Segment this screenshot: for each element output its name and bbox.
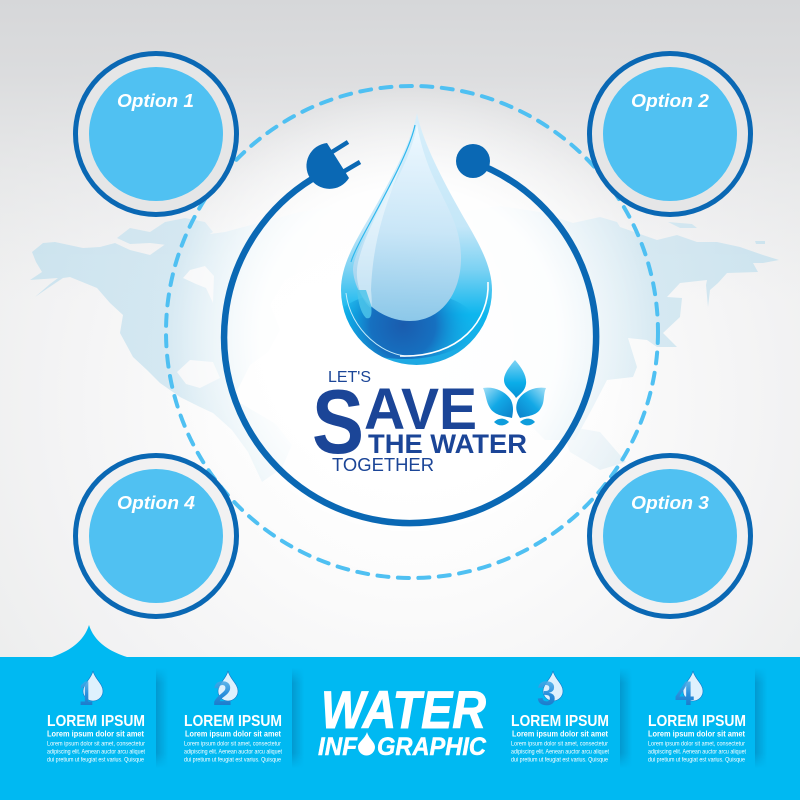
map bays (177, 266, 220, 388)
save the water slogan: TOGETHER (332, 454, 434, 475)
save the water slogan: S (312, 372, 364, 473)
option circle 3: Option 3 (631, 492, 710, 513)
option circle 1: Option 1 (117, 90, 194, 111)
water drop (333, 113, 492, 365)
icon: numbered drop 2: 2 (213, 675, 232, 713)
icon: numbered drop 4: 4 (675, 675, 694, 713)
card 3: LOREM IPSUM (511, 713, 609, 730)
option circle 4 (76, 456, 236, 616)
power cord ring with plug (224, 142, 596, 523)
card 1: LOREM IPSUM (47, 713, 145, 730)
card 3: Lorem ipsum dolor sit amet (512, 728, 608, 738)
option circle 4: Option 4 (117, 492, 195, 513)
water infographic title: GRAPHIC (377, 733, 487, 761)
icon: leaves (483, 360, 546, 425)
save the water slogan: AVE (364, 377, 477, 442)
option circle 2: Option 2 (631, 90, 710, 111)
card 1: Lorem ipsum dolor sit amet (47, 728, 144, 738)
water infographic title: WATER (321, 681, 486, 740)
card 2: LOREM IPSUM (184, 713, 282, 730)
card 3: dui pretium ut feugiat est varius. Quisque (511, 758, 609, 764)
card 1: Lorem ipsum dolor sit amet, consectetur (47, 742, 145, 748)
card 4: Lorem ipsum dolor sit amet, consectetur (648, 742, 745, 748)
dashed ring (166, 86, 658, 578)
card 4: Lorem ipsum dolor sit amet (648, 728, 745, 738)
card 2: adipiscing elit. Aenean auctor arcu aliquet (184, 750, 282, 756)
card 2: Lorem ipsum dolor sit amet, consectetur (184, 742, 281, 748)
save the water slogan: LET'S (328, 369, 371, 386)
card 4 (648, 671, 746, 764)
card 2 (184, 671, 282, 764)
card 3: Lorem ipsum dolor sit amet, consectetur (511, 742, 608, 748)
option circle 3 (590, 456, 750, 616)
card 1: dui pretium ut feugiat est varius. Quisque (47, 758, 145, 764)
card 4: dui pretium ut feugiat est varius. Quisque (648, 758, 746, 764)
card 1: adipiscing elit. Aenean auctor arcu aliquet (47, 750, 145, 756)
water infographic title: INF (318, 733, 358, 761)
icon: numbered drop 1: 1 (79, 675, 93, 713)
icon: title drop (358, 732, 375, 756)
card 4: adipiscing elit. Aenean auctor arcu aliquet (648, 750, 746, 756)
world map (30, 206, 779, 482)
card 3: adipiscing elit. Aenean auctor arcu aliquet (511, 750, 609, 756)
bottom band (0, 625, 800, 800)
card 2: dui pretium ut feugiat est varius. Quisque (184, 758, 282, 764)
icon: numbered drop 3: 3 (537, 675, 556, 713)
center map fade (160, 87, 660, 587)
water infographic title (318, 681, 487, 761)
option circle 2 (590, 54, 750, 214)
option circle 1 (76, 54, 236, 214)
save the water slogan: THE WATER (368, 429, 527, 459)
save the water slogan (312, 369, 527, 475)
card 4: LOREM IPSUM (648, 713, 746, 730)
card 2: Lorem ipsum dolor sit amet (185, 728, 281, 738)
card 1 (47, 671, 145, 764)
card 3 (511, 671, 609, 764)
